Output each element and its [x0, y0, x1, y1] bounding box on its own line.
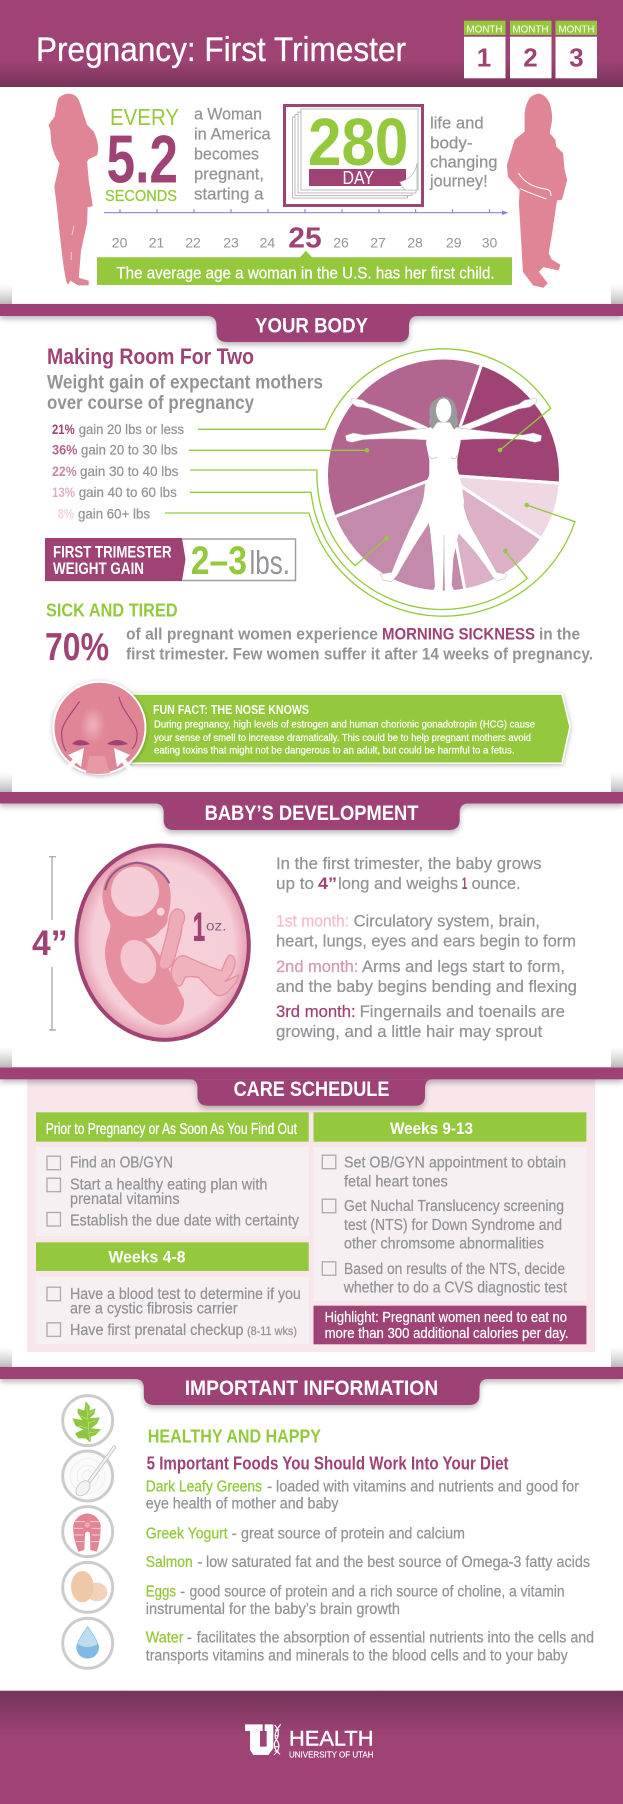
- age timeline: 23: [223, 235, 239, 251]
- legend: weight gain percentages: gain 60+ lbs: [78, 505, 150, 521]
- weight label: 1 oz: 1: [193, 906, 205, 950]
- column: weeks 4-8: are a cystic fibrosis carrier: [70, 1300, 238, 1317]
- icon: leafy greens: [63, 1396, 113, 1446]
- subheading: 5 important foods: 5 Important Foods You Should Work Into Your Diet: [147, 1453, 509, 1473]
- dimension: 4 inches: 4”: [32, 924, 68, 963]
- food: salmon: Salmon: [146, 1554, 193, 1571]
- first trimester weight gain box: 2–3: [191, 539, 247, 583]
- legend: weight gain percentages: 13%: [52, 484, 75, 500]
- age timeline: 30: [482, 235, 497, 251]
- illustration: fetus in womb: [67, 837, 258, 1048]
- panel: care schedule: [0, 1067, 623, 1352]
- weight label: 1 oz: [193, 906, 226, 950]
- food: salmon: -: [198, 1554, 203, 1571]
- legend: weight gain percentages: gain 20 lbs or less: [79, 421, 184, 437]
- morning sickness text: in the: [539, 624, 580, 643]
- average age callout: [97, 251, 512, 285]
- 280 day calendar: DAY: [342, 168, 374, 188]
- food: dark leafy greens: eye health of mother and baby: [146, 1496, 339, 1513]
- highlight callout: [314, 1306, 586, 1344]
- logo: university of utah health: HEALTH: [289, 1728, 374, 1751]
- heading: making room for two: Making Room For Two: [47, 344, 254, 369]
- intro text right: journey!: [429, 173, 488, 191]
- section band: important information: IMPORTANT INFORMATION: [185, 1377, 438, 1400]
- legend: weight gain percentages: gain 20 to 30 lbs: [81, 442, 178, 458]
- food: water: -: [187, 1630, 192, 1647]
- section band: your body: [0, 304, 623, 342]
- dimension: 4 inches: [32, 857, 68, 1030]
- fun fact banner: FUN FACT: THE NOSE KNOWS: [153, 703, 309, 717]
- section band: your body: YOUR BODY: [255, 315, 368, 338]
- age timeline: [104, 209, 508, 254]
- every 5.2 seconds stat: SECONDS: [105, 188, 177, 205]
- month 3 development: Fingernails and toenails are: [360, 1002, 565, 1021]
- month calendar cards: 1: [477, 43, 491, 73]
- highlight callout: Highlight: Pregnant women need to eat no: [325, 1309, 567, 1326]
- first trimester weight gain box: lbs.: [250, 544, 290, 581]
- column: weeks 9-13: Based on results of the NTS, decide: [344, 1261, 565, 1278]
- subheading: weight gain: [47, 371, 323, 414]
- baby development summary: In the first trimester, the baby grows: [276, 854, 542, 873]
- month calendar cards: 2: [523, 43, 538, 73]
- fun fact banner: [120, 694, 570, 763]
- section band: care schedule: [0, 1067, 623, 1106]
- food: eggs: instrumental for the baby’s brain growth: [146, 1601, 400, 1618]
- 70 percent statistic: 70%: [45, 626, 109, 669]
- every 5.2 seconds stat: EVERY: [110, 104, 179, 130]
- column: weeks 9-13: fetal heart tones: [344, 1174, 448, 1191]
- food: eggs: -: [180, 1584, 185, 1601]
- month calendar cards: MONTH: [466, 24, 502, 35]
- month calendar cards: MONTH: [558, 24, 594, 35]
- column: prior to pregnancy: Establish the due date with certainty: [70, 1213, 299, 1230]
- legend: weight gain percentages: [52, 421, 184, 521]
- silhouette: woman before pregnancy: [49, 94, 98, 285]
- baby development summary: up to: [276, 874, 314, 893]
- column: weeks 9-13: Weeks 9-13: [390, 1119, 473, 1138]
- food icons: [63, 1396, 114, 1668]
- pie chart: weight gain: [327, 358, 560, 592]
- intro text left: pregnant,: [194, 165, 264, 183]
- food: eggs: [146, 1584, 565, 1618]
- column: weeks 9-13: whether to do a CVS diagnostic test: [343, 1280, 568, 1297]
- baby development summary: 1: [462, 874, 467, 893]
- column: prior to pregnancy: Find an OB/GYN: [70, 1155, 173, 1172]
- intro text left: a Woman: [194, 105, 262, 123]
- column: weeks 4-8: Weeks 4-8: [108, 1247, 186, 1266]
- first trimester weight gain box: WEIGHT GAIN: [53, 559, 144, 578]
- food: greek yogurt: [146, 1525, 465, 1542]
- age timeline: 25: [288, 222, 322, 254]
- intro text left: in America: [194, 125, 272, 143]
- intro text right: life and: [430, 115, 484, 133]
- section band: care schedule: CARE SCHEDULE: [234, 1078, 389, 1101]
- month 2 development: Arms and legs start to form,: [362, 957, 565, 976]
- age timeline: 21: [149, 235, 164, 251]
- age timeline: 29: [446, 235, 462, 251]
- logo: university of utah health: [245, 1724, 374, 1759]
- column: weeks 9-13: Set OB/GYN appointment to obtain: [344, 1154, 566, 1171]
- 280 day calendar: 280: [308, 105, 408, 180]
- intro text left: starting a: [194, 185, 264, 203]
- column: weeks 4-8: (8-11 wks): [247, 1324, 297, 1338]
- age timeline: 22: [185, 235, 201, 251]
- food: eggs: good source of protein and a rich source of choline, a vitamin: [190, 1584, 565, 1601]
- intro text left: becomes: [194, 145, 259, 163]
- fun fact banner: eating toxins that might not be dangerous to an adult, but could be harmful to a fetus.: [154, 745, 514, 756]
- legend: weight gain percentages: 21%: [52, 421, 75, 437]
- fun fact banner: During pregnancy, high levels of estrogen and human chorionic gonadotropin (HCG) cause: [154, 719, 535, 730]
- morning sickness text: MORNING SICKNESS: [382, 624, 535, 643]
- month 3 development: 3rd month:: [276, 1002, 356, 1021]
- month calendar cards: MONTH: [512, 24, 548, 35]
- every 5.2 seconds stat: 5.2: [106, 122, 178, 198]
- subheading: weight gain: Weight gain of expectant mothers: [47, 371, 323, 393]
- footer: [0, 1691, 623, 1804]
- food: dark leafy greens: loaded with vitamins and nutrients and good for: [276, 1479, 579, 1496]
- month 3 development: [276, 1002, 565, 1041]
- food: greek yogurt: -: [232, 1525, 237, 1542]
- intro text right: body-: [430, 134, 472, 152]
- month 1 development: [276, 912, 576, 951]
- food: salmon: low saturated fat and the best source of Omega-3 fatty acids: [206, 1554, 590, 1571]
- section band: baby's development: BABY’S DEVELOPMENT: [205, 802, 419, 825]
- column: weeks 9-13: [314, 1112, 586, 1301]
- logo: university of utah health: UNIVERSITY OF UTAH: [289, 1749, 374, 1759]
- weight label: 1 oz: oz.: [206, 918, 226, 934]
- silhouette: pregnant woman: [507, 94, 567, 287]
- column: weeks 4-8: Have a blood test to determine if you: [70, 1286, 301, 1303]
- legend: weight gain percentages: 36%: [52, 442, 78, 458]
- column: weeks 9-13: Get Nuchal Translucency screening: [344, 1198, 564, 1215]
- section band: important information: [0, 1367, 623, 1405]
- age timeline: 24: [260, 235, 275, 251]
- month 1 development: Circulatory system, brain,: [354, 912, 540, 931]
- intro text right: changing: [430, 154, 498, 172]
- intro text left: [194, 105, 272, 203]
- food: water: transports vitamins and minerals to the blood cells and to your baby: [146, 1647, 568, 1664]
- food: eggs: Eggs: [146, 1584, 176, 1601]
- subheading: weight gain: over course of pregnancy: [47, 392, 254, 414]
- column: prior to pregnancy: prenatal vitamins: [70, 1191, 180, 1208]
- age timeline: 26: [333, 235, 349, 251]
- food: greek yogurt: Greek Yogurt: [146, 1525, 228, 1542]
- column: weeks 4-8: Have first prenatal checkup: [70, 1322, 244, 1339]
- heading: healthy and happy: HEALTHY AND HAPPY: [148, 1427, 321, 1447]
- average age callout: The average age a woman in the U.S. has her first child.: [116, 264, 495, 282]
- age timeline: 27: [370, 235, 386, 251]
- age timeline: 20: [112, 235, 128, 251]
- leader lines: pie callouts: [165, 349, 575, 616]
- baby development summary: [276, 854, 542, 893]
- first trimester weight gain box: FIRST TRIMESTER: [53, 543, 172, 562]
- legend: weight gain percentages: 22%: [52, 463, 77, 479]
- baby development summary: long and weighs: [338, 874, 458, 893]
- month calendar cards: 3: [569, 43, 584, 73]
- column: weeks 9-13: other chromsome abnormalities: [344, 1236, 544, 1253]
- icon: nose: [54, 682, 146, 774]
- food: dark leafy greens: -: [267, 1479, 272, 1496]
- column: prior to pregnancy: Prior to Pregnancy or As Soon As You Find Out: [46, 1121, 297, 1138]
- column: weeks 4-8: [36, 1242, 309, 1344]
- icon: greek yogurt: [63, 1447, 114, 1501]
- month 1 development: heart, lungs, eyes and ears begin to form: [276, 932, 576, 951]
- figure: woman with outstretched limbs: [345, 397, 542, 597]
- age timeline: 28: [407, 235, 423, 251]
- month 2 development: and the baby begins bending and flexing: [276, 977, 577, 996]
- food: water: Water: [146, 1630, 184, 1647]
- food: water: facilitates the absorption of essential nutrients into the cells and: [197, 1630, 594, 1647]
- every 5.2 seconds stat: [105, 104, 179, 205]
- morning sickness text: [126, 624, 593, 663]
- section band: baby's development: [0, 792, 623, 830]
- column: weeks 9-13: test (NTS) for Down Syndrome and: [344, 1217, 562, 1234]
- baby development summary: ounce.: [472, 874, 521, 893]
- 280 day calendar: [284, 105, 422, 206]
- legend: weight gain percentages: 8%: [58, 505, 74, 521]
- column: prior to pregnancy: Start a healthy eating plan with: [70, 1176, 267, 1193]
- first trimester weight gain box: [45, 538, 296, 583]
- icon: water drop: [63, 1618, 113, 1668]
- intro text right: [429, 115, 498, 191]
- month 2 development: 2nd month:: [276, 957, 358, 976]
- icon: salmon: [63, 1507, 113, 1557]
- legend: weight gain percentages: gain 30 to 40 lbs: [80, 463, 178, 479]
- heading: sick and tired: SICK AND TIRED: [46, 601, 178, 621]
- food: water: [146, 1630, 594, 1664]
- highlight callout: more than 300 additional calories per day.: [325, 1325, 569, 1342]
- food: dark leafy greens: [146, 1479, 579, 1513]
- month 1 development: 1st month:: [276, 912, 349, 931]
- fun fact banner: your sense of smell to increase dramatically. This could be to help pregnant mothers avoid: [154, 733, 531, 744]
- food: dark leafy greens: Dark Leafy Greens: [146, 1479, 262, 1496]
- side shadows beside section bands: [0, 284, 623, 1367]
- header banner: [0, 0, 623, 87]
- month 2 development: [276, 957, 577, 996]
- month calendar cards: [464, 21, 597, 78]
- food: greek yogurt: great source of protein and calcium: [241, 1525, 465, 1542]
- month 3 development: growing, and a little hair may sprout: [276, 1022, 543, 1041]
- icon: eggs: [63, 1562, 113, 1612]
- title: Pregnancy: First Trimester: [36, 31, 406, 69]
- column: prior to pregnancy: [36, 1112, 309, 1236]
- baby development summary: 4”: [318, 874, 337, 893]
- legend: weight gain percentages: gain 40 to 60 lbs: [79, 484, 177, 500]
- morning sickness text: of all pregnant women experience: [126, 624, 378, 643]
